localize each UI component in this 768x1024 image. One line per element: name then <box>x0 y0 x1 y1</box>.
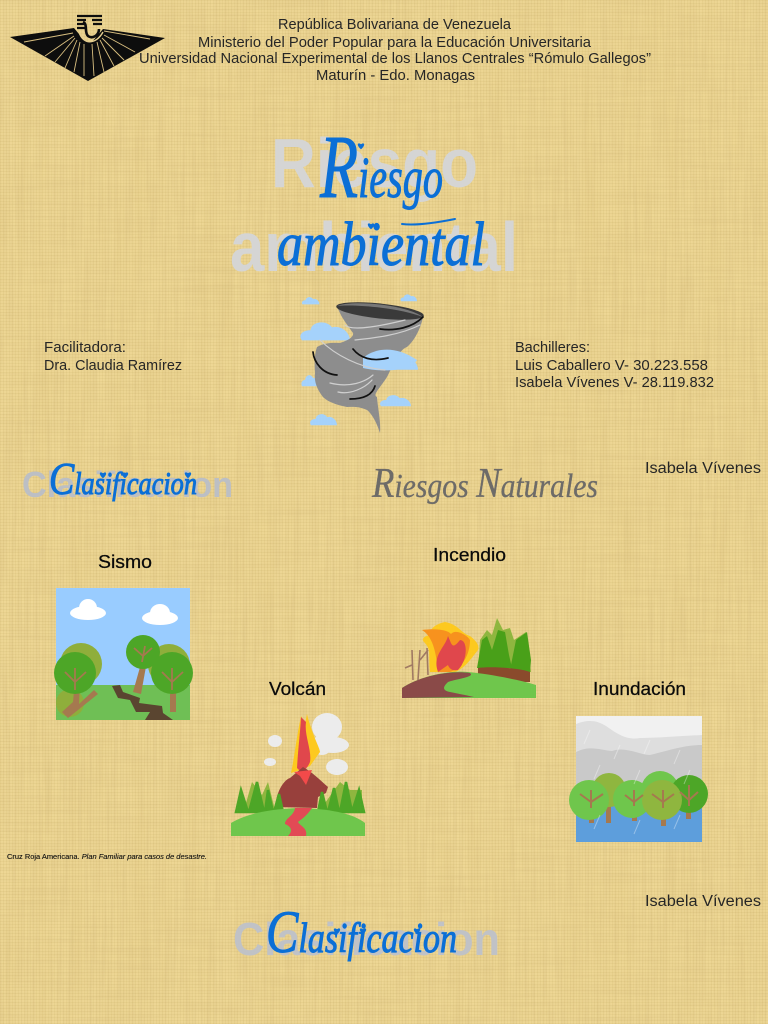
title: ghost text behind: Riesgo <box>271 124 478 202</box>
header: institution text: Universidad Nacional Experimental de los Llanos Centrales “Rómulo Gallegos” <box>139 51 651 67</box>
illustration: flood <box>569 716 708 842</box>
illustration: volcano <box>231 713 365 836</box>
title: script Riesgo ambiental: Riesgo <box>319 118 443 217</box>
illustration: wildfire <box>402 618 536 698</box>
title: ghost text behind: ambiental <box>230 208 518 286</box>
text block: bachilleres: Isabela Vívenes V- 28.119.832 <box>515 375 714 391</box>
title: ghost text behind <box>230 124 518 286</box>
header: institution text: República Bolivariana de Venezuela <box>278 17 512 33</box>
clouds behind funnel <box>300 294 418 425</box>
icon: tornado <box>300 294 425 433</box>
text block: bachilleres: Luis Caballero V- 30.223.558 <box>515 358 708 374</box>
illustration: earthquake <box>54 588 193 720</box>
title: script Riesgo ambiental <box>277 118 485 279</box>
heading: Riesgos Naturales: Riesgos Naturales <box>371 461 598 507</box>
text block: facilitadora <box>44 340 182 374</box>
heading: Clasificacion: Clasificacion <box>22 464 233 505</box>
heading: Clasificacion bottom: Clasificacion <box>233 913 500 965</box>
citation: Cruz Roja Americana. Plan Familiar para casos de desastre. <box>7 854 207 861</box>
author note: top: Isabela Vívenes <box>645 460 761 477</box>
label: Volcán: Volcán <box>269 678 326 699</box>
label: Sismo: Sismo <box>98 551 152 572</box>
emblem marks <box>77 16 102 37</box>
text block: facilitadora: Facilitadora: <box>44 340 126 356</box>
text block: bachilleres: Bachilleres: <box>515 340 590 356</box>
label: Inundación: Inundación <box>593 678 686 699</box>
header: institution text: Maturín - Edo. Monagas <box>316 68 475 84</box>
icon: university logo <box>10 16 165 81</box>
title: script Riesgo ambiental: ambiental <box>277 211 485 279</box>
header: institution text: Ministerio del Poder Popular para la Educación Universitaria <box>198 35 592 51</box>
text block: facilitadora: Dra. Claudia Ramírez <box>44 358 182 374</box>
heading: Clasificacion: Clasificacion <box>49 453 197 504</box>
text block: bachilleres <box>515 340 714 391</box>
heading: Clasificacion bottom: Clasificacion <box>266 899 457 965</box>
author note: bottom: Isabela Vívenes <box>645 893 761 910</box>
label: Incendio: Incendio <box>433 544 506 565</box>
header: institution text <box>139 17 651 84</box>
